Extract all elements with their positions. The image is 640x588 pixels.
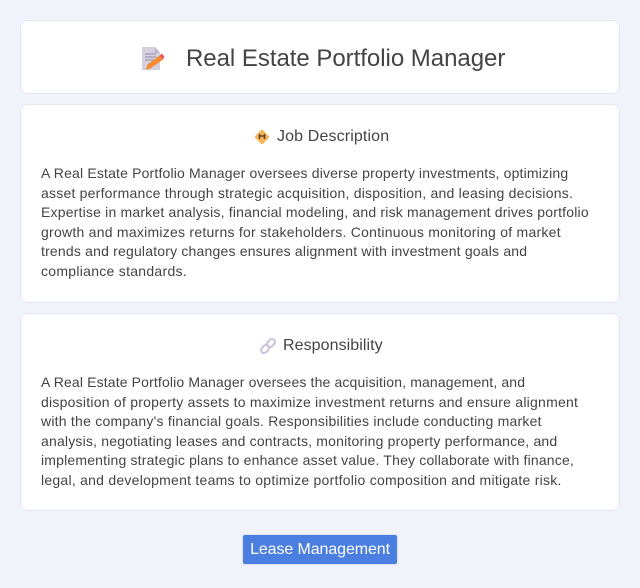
- heading text: Responsibility: [283, 337, 383, 354]
- text block: job description: growth and maximizes returns for stakeholders. Continuous monitoring of market: [41, 224, 561, 240]
- text block: responsibility: implementing strategic plans to enhance asset value. They collaborate with finance,: [41, 452, 574, 468]
- text block: job description: asset performance through strategic acquisition, disposition, and leasing decisions.: [41, 184, 573, 200]
- text block: responsibility: [41, 374, 578, 488]
- panel: job description: [20, 104, 620, 303]
- text block: responsibility: analysis, negotiating leases and contracts, monitoring property performance, and: [41, 432, 557, 448]
- text block: job description: A Real Estate Portfolio Manager oversees diverse property investments, optimizing: [41, 165, 568, 181]
- text block: responsibility: A Real Estate Portfolio Manager oversees the acquisition, management, and: [41, 374, 525, 390]
- text block: job description: trends and regulatory changes ensures alignment with investment goals and: [41, 243, 527, 259]
- icon: document with pencil: [142, 47, 164, 70]
- text block: job description: compliance standards.: [41, 262, 187, 278]
- button: lease management: [242, 534, 398, 565]
- heading: responsibility: [260, 337, 383, 354]
- button: lease management: Lease Management: [250, 541, 390, 558]
- text block: job description: Expertise in market analysis, financial modeling, and risk management drives portfolio: [41, 204, 589, 220]
- heading: job description: [255, 128, 389, 145]
- panel: title: [20, 20, 620, 94]
- icon: chain link: [260, 338, 276, 354]
- icon: diamond sign: [255, 130, 269, 144]
- heading text: Job Description: [277, 128, 389, 145]
- text block: responsibility: disposition of property assets to maximize investment returns and ensure alignment: [41, 394, 578, 410]
- title text: Real Estate Portfolio Manager: [186, 45, 505, 72]
- text block: responsibility: with the company's financial goals. Responsibilities include conducting market: [41, 413, 542, 429]
- text block: responsibility: legal, and development teams to optimize portfolio composition and mitigate risk.: [41, 472, 562, 488]
- text block: job description: [41, 165, 589, 279]
- panel: responsibility: [20, 313, 620, 511]
